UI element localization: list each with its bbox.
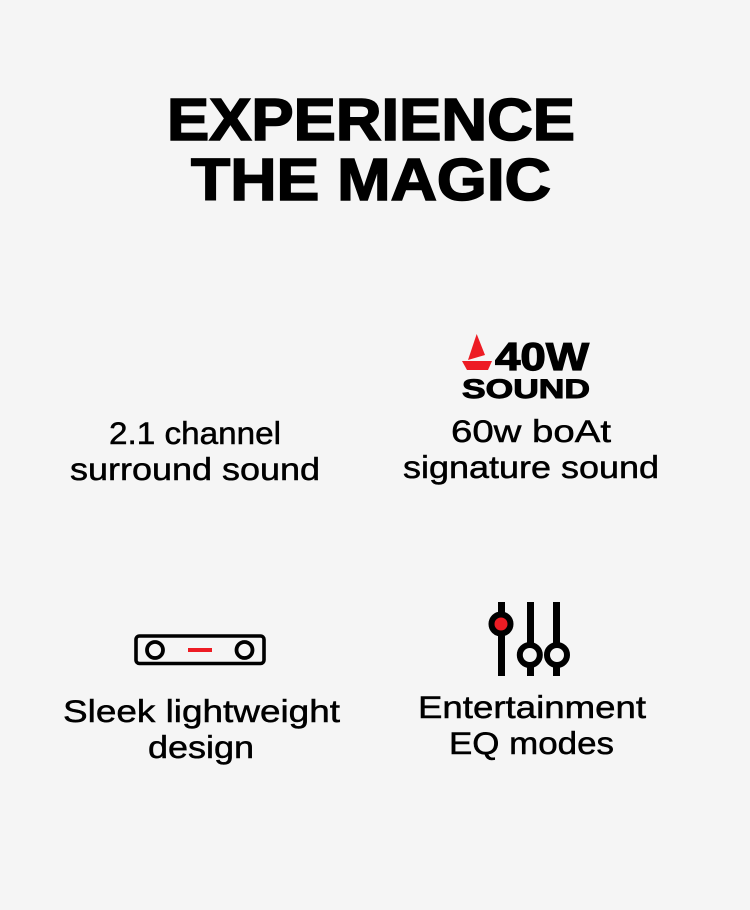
text: entertainment EQ modes	[418, 689, 646, 761]
text: sleek lightweight design: design	[148, 729, 254, 765]
text: 60w boAt signature sound: signature sound	[403, 449, 659, 485]
text: 60w boAt signature sound: 60w boAt	[451, 413, 611, 449]
text: 2.1 channel surround sound: surround sound	[70, 451, 320, 487]
text: sleek lightweight design	[63, 693, 340, 765]
logo text: SOUND: SOUND	[462, 374, 590, 404]
title	[167, 87, 575, 213]
title: EXPERIENCE	[167, 87, 575, 153]
text: entertainment EQ modes: Entertainment	[418, 689, 646, 725]
icon: equalizer sliders	[492, 602, 567, 676]
text: sleek lightweight design: Sleek lightweight	[63, 693, 340, 729]
text: 2.1 channel surround sound	[70, 415, 320, 487]
text: 60w boAt signature sound	[403, 413, 659, 485]
text: entertainment EQ modes: EQ modes	[449, 725, 614, 761]
logo text: 40W: 40W	[495, 336, 589, 379]
icon: boAt 40W sound logo	[462, 334, 590, 404]
text: 2.1 channel surround sound: 2.1 channel	[109, 415, 281, 451]
title: THE MAGIC	[191, 147, 551, 213]
icon: soundbar	[136, 636, 264, 664]
icon: red boat	[462, 334, 492, 370]
